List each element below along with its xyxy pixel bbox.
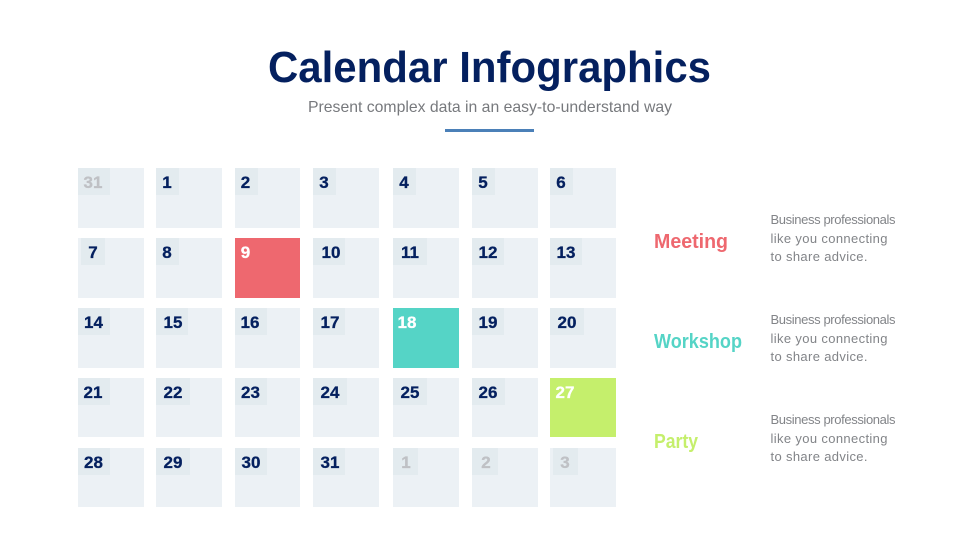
meeting description: Business professionals xyxy=(770,212,896,227)
day: 3 xyxy=(313,168,379,228)
workshop description: like you connecting xyxy=(770,331,888,346)
day: 30 xyxy=(235,448,300,507)
day: 5: 5 xyxy=(478,173,488,192)
day: 12: 12 xyxy=(479,243,497,262)
day: 3 next month xyxy=(550,448,616,507)
day: 17: 17 xyxy=(321,313,339,332)
day: 6 xyxy=(550,168,616,228)
party description xyxy=(770,412,896,464)
day: 21 xyxy=(78,378,144,437)
day: 24: 24 xyxy=(321,383,340,402)
day: 31 xyxy=(313,448,379,507)
meeting label: Meeting xyxy=(654,231,728,253)
day: 10: 10 xyxy=(322,243,340,262)
day: 18 workshop: 18 xyxy=(398,313,416,332)
day: 7: 7 xyxy=(88,243,98,262)
day: 24 xyxy=(313,378,379,437)
party description: Business professionals xyxy=(770,412,896,427)
day: 14 xyxy=(78,308,144,368)
day: 1 xyxy=(156,168,222,228)
party description: like you connecting xyxy=(770,431,888,446)
day: 15 xyxy=(156,308,222,368)
day: 22: 22 xyxy=(164,383,182,402)
day: 31 previous month xyxy=(78,168,144,228)
day: 13 xyxy=(550,238,616,298)
day: 7 xyxy=(78,238,144,298)
day: 9 meeting xyxy=(235,238,300,298)
day: 26 xyxy=(472,378,538,437)
day: 25 xyxy=(393,378,459,437)
day: 5 xyxy=(472,168,538,228)
day: 20: 20 xyxy=(558,313,576,332)
day: 31 previous month: 31 xyxy=(84,173,102,192)
day: 21: 21 xyxy=(84,383,102,402)
day: 1: 1 xyxy=(162,173,172,192)
day: 18 workshop xyxy=(393,308,459,368)
day: 11 xyxy=(393,238,459,298)
day: 3 next month: 3 xyxy=(560,453,570,472)
day: 4: 4 xyxy=(399,173,409,192)
legend: meeting xyxy=(654,212,896,264)
calendar grid xyxy=(78,168,616,507)
day: 8 xyxy=(156,238,222,298)
party label: Party xyxy=(654,431,699,453)
day: 9 meeting: 9 xyxy=(241,243,250,262)
meeting description: like you connecting xyxy=(770,231,888,246)
day: 31: 31 xyxy=(321,453,339,472)
meeting description xyxy=(770,212,896,264)
day: 23 xyxy=(235,378,300,437)
workshop description: to share advice. xyxy=(770,349,868,364)
day: 11: 11 xyxy=(401,243,419,262)
title underline xyxy=(445,129,534,132)
title: Calendar Infographics xyxy=(268,43,711,92)
day: 16 xyxy=(235,308,300,368)
day: 2 xyxy=(235,168,300,228)
day: 29 xyxy=(156,448,222,507)
day: 16: 16 xyxy=(241,313,259,332)
day: 13: 13 xyxy=(557,243,575,262)
day: 22 xyxy=(156,378,222,437)
workshop description: Business professionals xyxy=(770,312,896,327)
workshop label: Workshop xyxy=(654,331,742,353)
day: 2 next month xyxy=(472,448,538,507)
day: 14: 14 xyxy=(84,313,103,332)
day: 26: 26 xyxy=(479,383,497,402)
day: 1 next month: 1 xyxy=(401,453,411,472)
meeting description: to share advice. xyxy=(770,249,868,264)
day: 3: 3 xyxy=(319,173,329,192)
day: 15: 15 xyxy=(164,313,182,332)
day: 2: 2 xyxy=(241,173,250,192)
legend: party xyxy=(654,412,896,464)
day: 25: 25 xyxy=(401,383,419,402)
day: 6: 6 xyxy=(556,173,566,192)
day: 8: 8 xyxy=(162,243,172,262)
day: 10 xyxy=(313,238,379,298)
day: 29: 29 xyxy=(164,453,182,472)
day: 28 xyxy=(78,448,144,507)
day: 1 next month xyxy=(393,448,459,507)
day: 4 xyxy=(393,168,459,228)
workshop description xyxy=(770,312,896,364)
day: 17 xyxy=(313,308,379,368)
day: 28: 28 xyxy=(84,453,103,472)
day: 23: 23 xyxy=(241,383,260,402)
day: 27 party xyxy=(550,378,616,437)
day: 27 party: 27 xyxy=(556,383,574,402)
day: 20 xyxy=(550,308,616,368)
day: 30: 30 xyxy=(242,453,260,472)
day: 12 xyxy=(472,238,538,298)
party description: to share advice. xyxy=(770,449,868,464)
legend: workshop xyxy=(654,312,896,364)
day: 19: 19 xyxy=(479,313,497,332)
day: 19 xyxy=(472,308,538,368)
day: 2 next month: 2 xyxy=(481,453,491,472)
subtitle: Present complex data in an easy-to-understand way xyxy=(308,99,672,116)
